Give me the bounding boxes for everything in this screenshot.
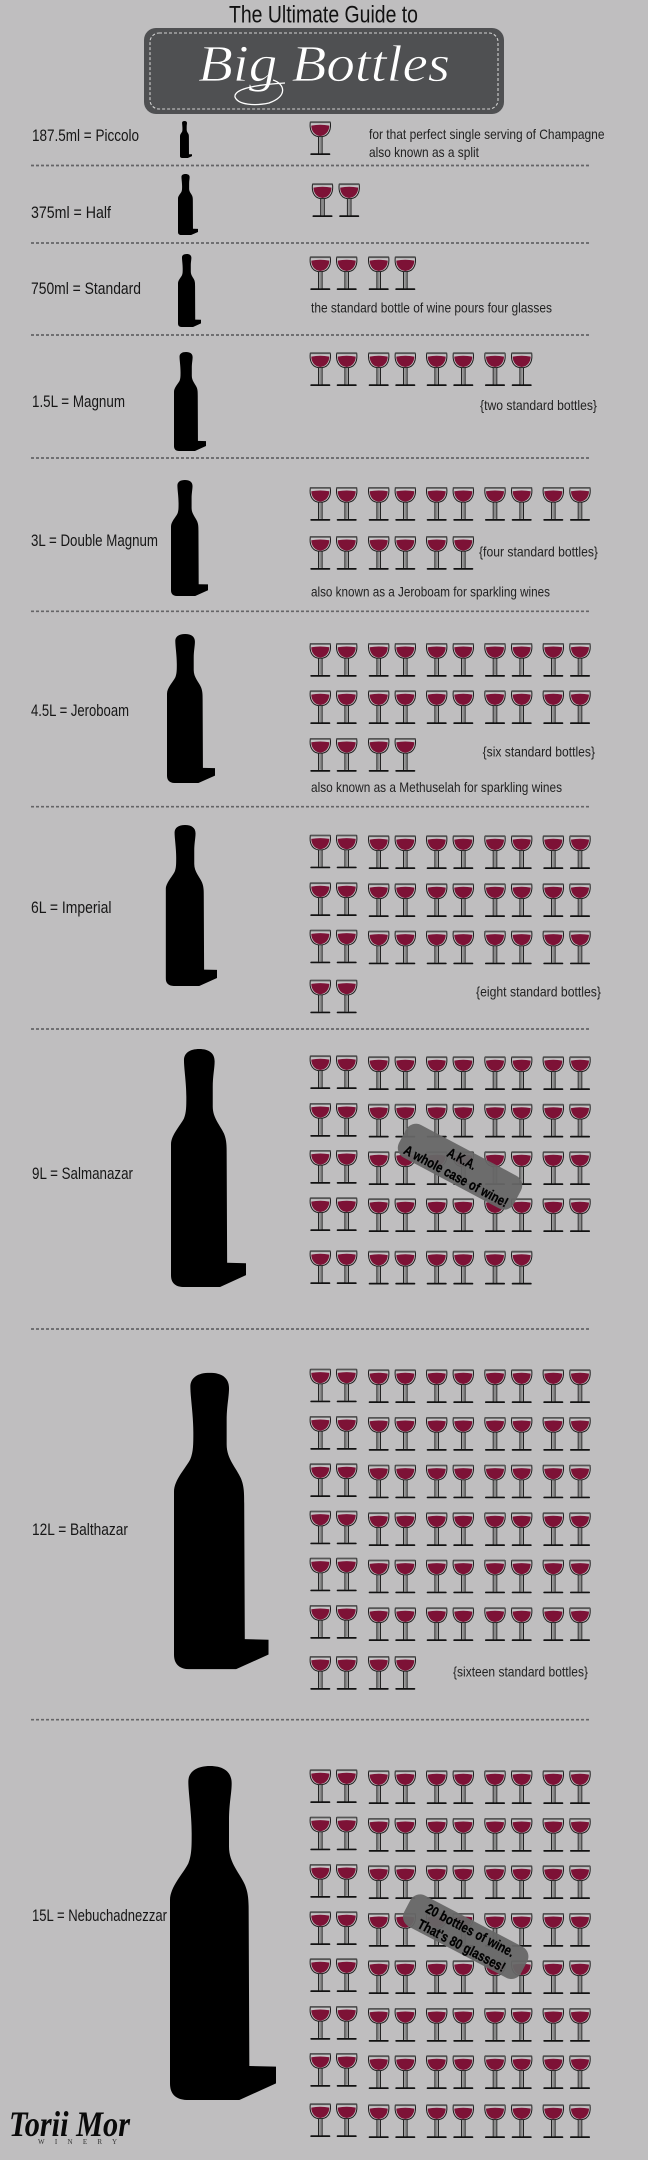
glasses: 80: [310, 1770, 590, 2138]
callout: A.K.A. a whole case of wine: A whole case of wine!: [401, 1142, 511, 1210]
bottle: Double Magnum: [171, 480, 208, 596]
label: Standard: 750ml = Standard: [31, 280, 141, 298]
glasses: 4: [310, 257, 416, 290]
panel: Jeroboam: [31, 634, 595, 795]
bottle: Piccolo: [180, 121, 192, 158]
label: Imperial: 6L = Imperial: [31, 899, 112, 917]
note: Standard: the standard bottle of wine pours four glasses: [311, 300, 552, 316]
panel: Piccolo: [32, 121, 605, 160]
bottle: Magnum: [174, 352, 206, 451]
bottle: Nebuchadnezzar: [170, 1766, 276, 2100]
panel: Salmanazar: [32, 1049, 590, 1287]
panel: Balthazar: [32, 1370, 590, 1690]
panel: Standard: [31, 254, 552, 327]
bottle: Salmanazar: [171, 1049, 246, 1287]
note: Jeroboam for sparkling: also known as a Jeroboam for sparkling wines: [311, 584, 550, 600]
glasses: 32: [310, 836, 590, 1013]
panel: Imperial: [31, 825, 601, 1013]
note: Piccolo: for that perfect single serving of Champagne: [369, 126, 605, 142]
logo: Torii Mor Winery: WINERY: [38, 2138, 117, 2146]
panel: Double Magnum: [31, 480, 598, 600]
callout: 20 bottles of wine: 20 bottles of wine.: [423, 1900, 517, 1960]
note: Methuselah for sparkling: also known as a Methuselah for sparkling wines: [311, 779, 562, 795]
label: Nebuchadnezzar: 15L = Nebuchadnezzar: [32, 1907, 167, 1925]
bottle: Jeroboam: [167, 634, 215, 783]
title: The Ultimate Guide to: [229, 2, 418, 28]
glass: [310, 122, 331, 155]
note: Piccolo: [369, 126, 605, 160]
callout: 20 bottles of wine: That's 80 glasses!: [415, 1916, 508, 1975]
panel: Half: [31, 174, 359, 235]
logo: Torii Mor Winery: Torii Mor: [9, 2104, 131, 2144]
banner: Big Bottles: [144, 28, 504, 114]
panel: Nebuchadnezzar: [32, 1766, 590, 2138]
callout: 20 bottles of wine: [399, 1891, 532, 1983]
bottle: Half: [178, 174, 198, 235]
bottle: Standard: [178, 254, 201, 327]
label: Salmanazar: 9L = Salmanazar: [32, 1165, 133, 1183]
label: Half: 375ml = Half: [31, 204, 111, 222]
glasses: 2: [312, 184, 359, 217]
label: Magnum: 1.5L = Magnum: [32, 393, 125, 411]
note: sixteen bottles: {sixteen standard bottles}: [453, 1664, 588, 1680]
note: Magnum: {two standard bottles}: [480, 397, 597, 413]
note: six bottles: {six standard bottles}: [483, 744, 595, 760]
note: Piccolo: also known as a split: [369, 144, 479, 160]
label: Piccolo: 187.5ml = Piccolo: [32, 127, 139, 145]
callout: A.K.A. a whole case of wine: [394, 1120, 526, 1214]
glasses: 16: [310, 488, 590, 570]
glasses: 8: [310, 353, 532, 386]
glasses: 48: [310, 1056, 590, 1284]
bottle: Balthazar: [174, 1373, 269, 1669]
glasses: 24: [310, 644, 590, 772]
callout: A.K.A. a whole case of wine: A.K.A.: [445, 1144, 479, 1173]
glasses: 64: [310, 1370, 590, 1690]
banner: Big Bottles: Big Bottles: [198, 36, 450, 93]
label: Jeroboam: 4.5L = Jeroboam: [31, 702, 129, 720]
note: eight bottles: {eight standard bottles}: [476, 984, 601, 1000]
note: four bottles: {four standard bottles}: [479, 544, 598, 560]
label: Double Magnum: 3L = Double Magnum: [31, 532, 158, 550]
bottle: Imperial: [166, 825, 217, 986]
panel: Magnum: [32, 352, 597, 451]
label: Balthazar: 12L = Balthazar: [32, 1521, 128, 1539]
